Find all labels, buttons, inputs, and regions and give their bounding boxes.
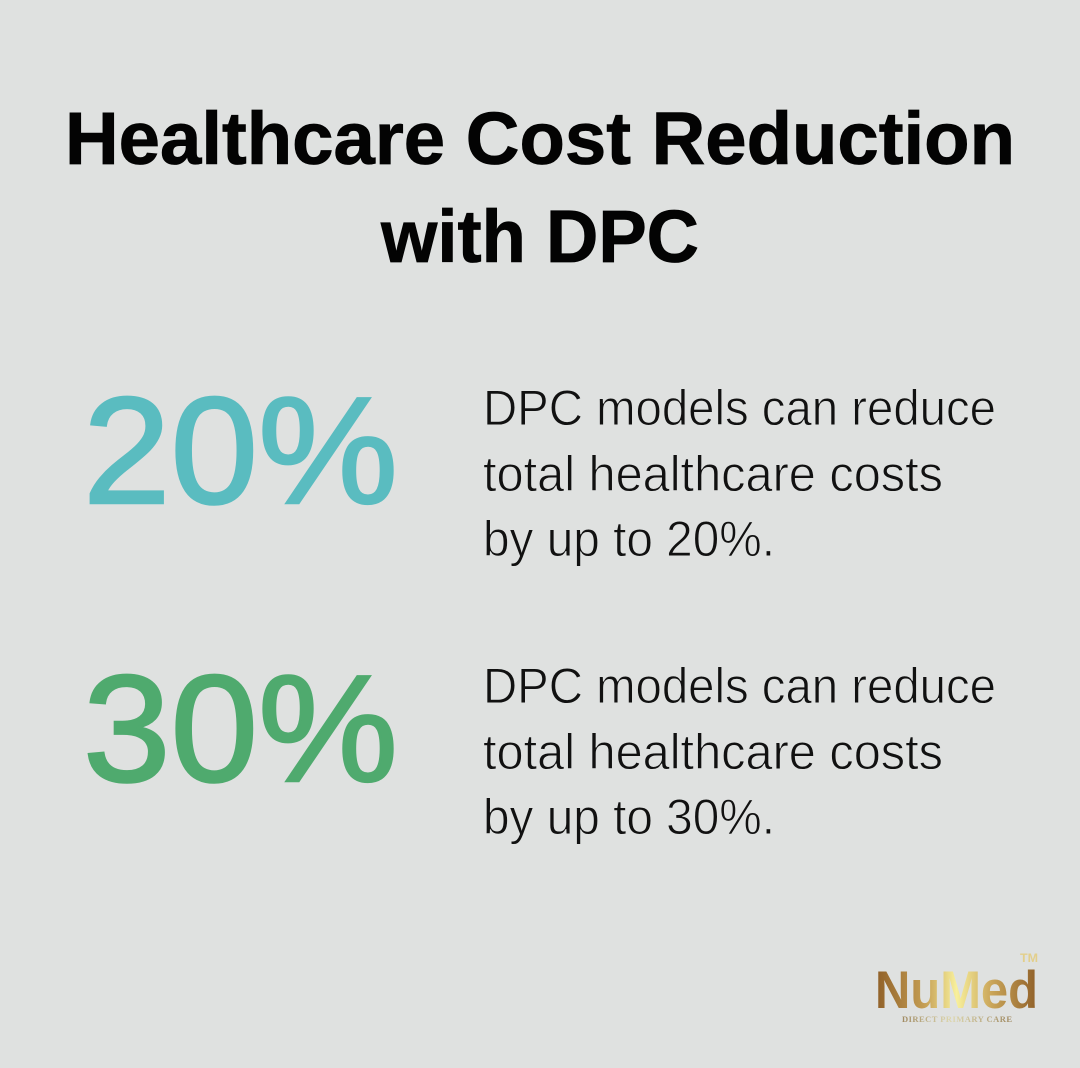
logo: NuMed: DIRECT PRIMARY CARE bbox=[902, 1014, 1012, 1024]
logo: NuMed: TM bbox=[1020, 951, 1038, 965]
text block: 30% description bbox=[483, 658, 996, 845]
text block: 20% description: DPC models can reduce bbox=[483, 380, 996, 436]
logo: NuMed: NuMed bbox=[875, 961, 1038, 1020]
text block: 20% description bbox=[483, 380, 996, 567]
title bbox=[65, 97, 1015, 278]
title: with DPC bbox=[380, 195, 699, 278]
title: Healthcare Cost Reduction bbox=[65, 97, 1015, 180]
stat: 30%: 30% bbox=[83, 644, 398, 814]
stat: 20%: 20% bbox=[83, 366, 398, 536]
text block: 20% description: total healthcare costs bbox=[483, 446, 943, 502]
text block: 30% description: DPC models can reduce bbox=[483, 658, 996, 714]
text block: 30% description: total healthcare costs bbox=[483, 724, 943, 780]
text block: 30% description: by up to 30%. bbox=[483, 789, 775, 845]
text block: 20% description: by up to 20%. bbox=[483, 511, 775, 567]
